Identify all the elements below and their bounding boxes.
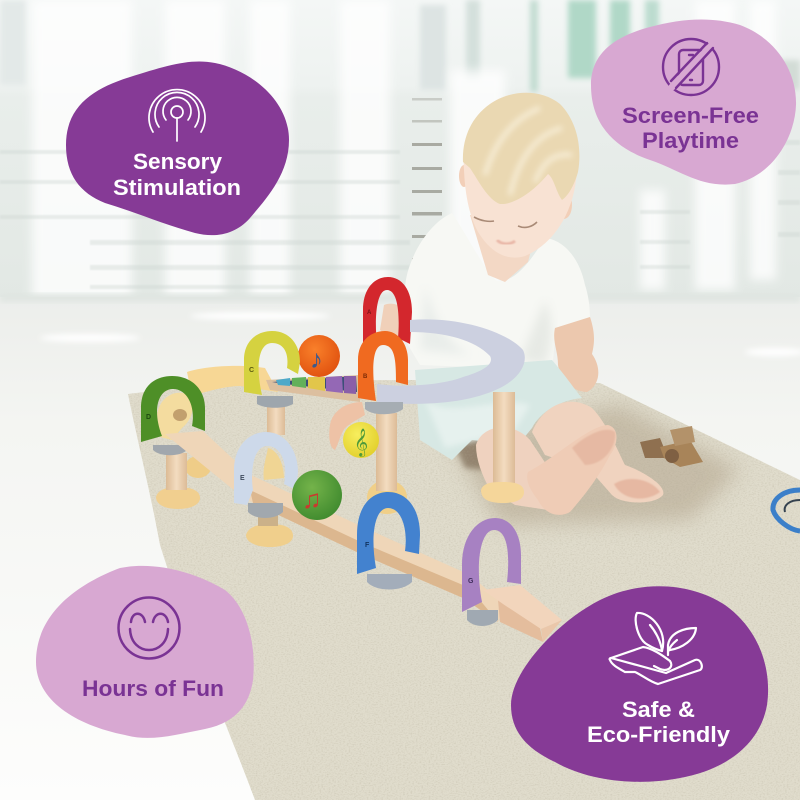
child: blond hair (463, 93, 579, 204)
panel: hours of fun (36, 566, 254, 738)
toy: wooden ramp plank (165, 431, 505, 622)
background: room with curtains (0, 0, 800, 305)
toy: ramp end block (483, 585, 562, 642)
child: near leg (476, 427, 550, 510)
heading: sensory stimulation: Stimulation (113, 175, 241, 200)
wooden toy vehicle (640, 426, 703, 467)
toy: orange ball with note (298, 335, 340, 377)
toy: red arch A (363, 277, 412, 345)
child: shorts (415, 360, 582, 460)
toy: gray collar under B (365, 402, 403, 414)
toy: yellow-green arch C: C (249, 367, 254, 374)
toy: left base (156, 487, 200, 509)
toy: base under E (246, 503, 293, 547)
rug (120, 375, 800, 800)
panel: sensory stimulation (66, 61, 289, 235)
child: neck (470, 215, 540, 282)
toy: red arch A: A (367, 310, 372, 316)
icon: signal antenna (149, 90, 205, 141)
toy: pillar under C (267, 405, 285, 435)
toy: green ball with note: ♫ (302, 484, 322, 514)
toy: left pillar (166, 453, 187, 490)
heading: screen-free playtime: Screen-Free (622, 103, 759, 128)
toy: orange ball with note: ♪ (310, 344, 323, 374)
toy: yellow curve behind E (263, 448, 284, 480)
toy: yellow ball with clef (343, 422, 379, 458)
toy: loop inside green arch (157, 393, 193, 440)
child: rear arm behind track (380, 304, 416, 345)
heading: safe and eco-friendly: Eco-Friendly (587, 722, 731, 747)
toy: blue arch F: F (365, 542, 370, 549)
toy: right pillar and base (481, 392, 524, 503)
toy: rear left support base (185, 456, 211, 478)
toy: green ball with note (292, 470, 342, 520)
child: t-shirt (405, 213, 590, 370)
toy: gray collar under C (257, 396, 293, 408)
marble run toy (141, 277, 562, 642)
toy: blue arch F (357, 492, 420, 574)
toy: gray collar under F (367, 574, 412, 590)
child: eyes, nose and mouth (474, 217, 537, 227)
toy: green arch D (141, 376, 205, 442)
child: right arm and hand (554, 317, 598, 392)
curtain folds (32, 0, 776, 300)
panel: safe and eco-friendly (511, 586, 768, 782)
toy: left gray collar (153, 445, 187, 455)
child (380, 93, 663, 515)
toy: gray half-ring track (377, 319, 525, 404)
heading: safe and eco-friendly: Safe & (622, 697, 695, 722)
toy: back wooden pillar and base (367, 413, 407, 514)
icon: no phone (663, 39, 719, 95)
floor (0, 294, 800, 800)
icon: smiling face (118, 598, 180, 658)
heading: screen-free playtime (622, 103, 759, 153)
child: ears (459, 165, 572, 219)
child: near foot (527, 425, 616, 515)
heading: sensory stimulation (113, 149, 241, 200)
toy: orange arch B (358, 331, 408, 401)
toy: light blue arch E: E (240, 475, 245, 482)
child: face (464, 93, 579, 258)
toy: child hand fingers (329, 402, 365, 450)
heading: screen-free playtime: Playtime (642, 128, 739, 153)
toy: purple arch G: G (468, 578, 474, 585)
toy: gray collar under G (467, 610, 498, 626)
toy: curved yellow loop (187, 366, 278, 396)
toy: light blue arch E (234, 432, 298, 505)
toy: xylophone platform (266, 375, 360, 402)
toy: yellow-green arch C (244, 331, 300, 395)
panel: screen-free playtime (591, 19, 796, 185)
heading: hours of fun: Hours of Fun (82, 676, 224, 701)
child: far thigh and far foot (532, 402, 663, 502)
heading: sensory stimulation: Sensory (133, 149, 223, 174)
toy: purple arch G (462, 518, 521, 612)
toy: yellow ball with clef: 𝄞 (354, 429, 368, 457)
icon: hand holding plant (610, 613, 702, 684)
blinds seen through the gap (412, 98, 442, 261)
heading: safe and eco-friendly (587, 697, 731, 747)
toy: green arch D: D (146, 414, 151, 421)
toy: orange arch B: B (363, 374, 368, 380)
blue toy at right edge (773, 490, 800, 531)
